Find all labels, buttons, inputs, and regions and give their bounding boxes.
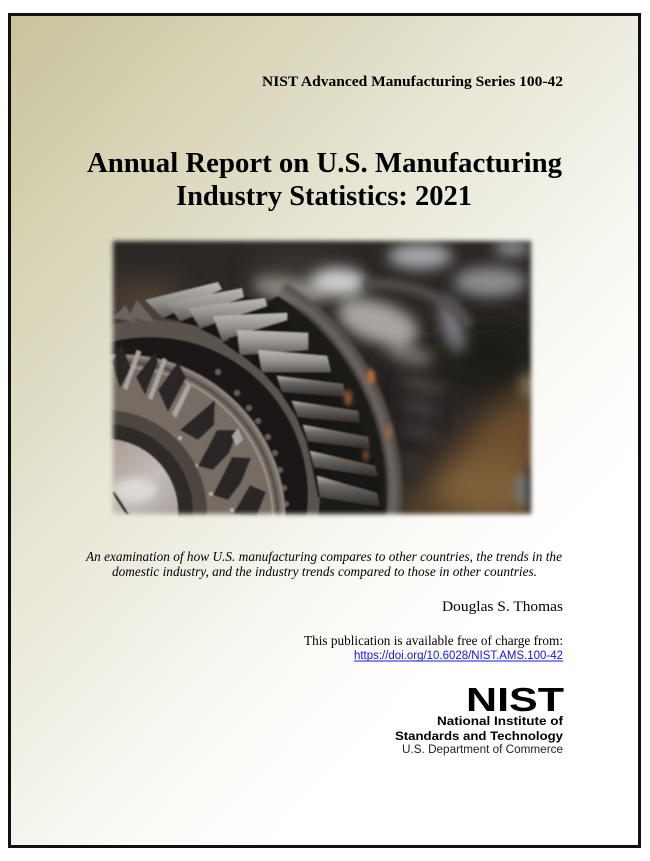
NIST full name: National Institute of [437,716,563,728]
DOI link: https://doi.org/10.6028/NIST.AMS.100-42 [354,650,563,662]
gear inner recess [110,336,308,516]
series label: NIST Advanced Manufacturing Series 100-42 [262,74,563,90]
main gear [110,281,404,518]
title [87,148,562,212]
NIST full name: U.S. Department of Commerce [402,744,563,756]
title: Industry Statistics: 2021 [176,181,472,212]
photo: close-up of metal gears [109,237,535,518]
NIST full name: Standards and Technology [395,731,564,743]
title: Annual Report on U.S. Manufacturing [87,148,562,179]
tooth wedges on the body [114,300,154,322]
subtitle [85,549,562,579]
author: Douglas S. Thomas [442,599,563,615]
NIST logo: NIST [466,681,564,718]
availability note: This publication is available free of charge from: [304,633,563,648]
gear teeth recesses [112,343,266,518]
subtitle: domestic industry, and the industry trends compared to those in other countries. [112,564,537,579]
teeth shadows [163,289,381,510]
gear body [111,320,321,516]
NIST full name [395,716,564,756]
teeth [145,282,331,372]
subtitle: An examination of how U.S. manufacturing compares to other countries, the trends in the [85,549,562,564]
orange reflections on the gear edge [344,369,392,461]
front small gear [110,357,283,517]
hub [111,410,208,516]
